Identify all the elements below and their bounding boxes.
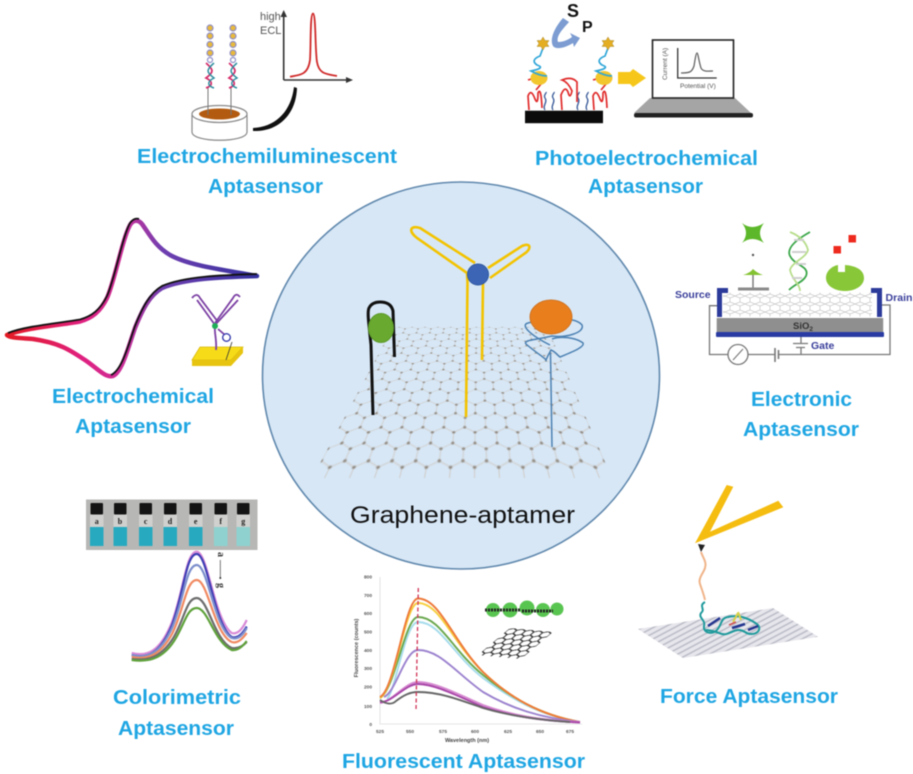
SiO2 layer and gate bar: 2 xyxy=(809,326,813,333)
label: Electronic Aptasensor: Aptasensor xyxy=(743,419,859,441)
cantilever xyxy=(695,485,783,543)
vials photo: g xyxy=(241,517,245,526)
label: Electrochemiluminescent Aptasensor: Electrochemiluminescent xyxy=(137,146,397,168)
label: Fluorescent Aptasensor: Fluorescent Aptasensor xyxy=(342,751,585,773)
fluorescence axes: 525 xyxy=(376,729,384,735)
blue looped aptamer xyxy=(525,300,583,447)
label: Photoelectrochemical Aptasensor xyxy=(535,148,758,198)
a to g arrow xyxy=(215,552,226,588)
fluorescence curves xyxy=(380,598,580,722)
ECL chart xyxy=(260,10,353,83)
fluorescence axes: 600 xyxy=(364,611,372,617)
SiO2 layer and gate bar: SiO xyxy=(793,321,809,332)
icon: S to P arrow: S xyxy=(567,1,579,21)
surface xyxy=(638,608,818,658)
circuit labels: Drain xyxy=(886,292,912,304)
fluorescence axes xyxy=(354,574,582,744)
aptamers with targets xyxy=(350,225,584,701)
panel: electrochemical aptasensor xyxy=(4,217,260,608)
arrow: electrode to chart xyxy=(253,87,297,131)
fluorescence axes: 800 xyxy=(364,574,372,580)
icon: stars xyxy=(537,37,614,50)
label: Electrochemical Aptasensor: Aptasensor xyxy=(75,416,191,438)
fluorescence axes: 625 xyxy=(504,729,512,735)
icon: DNA helix xyxy=(789,232,810,291)
fluorescence axes: Fluorescence (counts) xyxy=(354,618,360,677)
fluorescence axes: 400 xyxy=(364,648,372,654)
label: Electronic Aptasensor: Electronic xyxy=(751,389,852,411)
label: Electrochemiluminescent Aptasensor xyxy=(137,146,397,198)
arrow: yellow xyxy=(618,69,646,87)
label: Colorimetric Aptasensor xyxy=(113,687,241,740)
fluorescence axes: Wavelength (nm) xyxy=(445,738,489,744)
fluorescence axes: 200 xyxy=(364,684,372,690)
icon: S to P arrow: P xyxy=(582,19,593,36)
panel: central graphene-aptamer circle xyxy=(261,180,661,724)
panel: force aptasensor xyxy=(638,484,838,708)
fluorescence axes: 675 xyxy=(566,729,574,735)
label: Electrochemical Aptasensor: Electrochemical xyxy=(52,386,214,408)
panel: electrochemiluminescent aptasensor xyxy=(137,10,398,198)
vials photo: d xyxy=(168,517,173,526)
fluorescence axes: 100 xyxy=(364,704,372,710)
label: Electrochemiluminescent Aptasensor: Aptasensor xyxy=(208,176,323,198)
absorbance curves xyxy=(132,552,247,661)
panel: colorimetric aptasensor xyxy=(86,499,258,740)
icon: DNA probes xyxy=(206,25,237,115)
ECL chart: high xyxy=(260,11,281,23)
fluorescence axes: 650 xyxy=(536,729,544,735)
label: Colorimetric Aptasensor: Aptasensor xyxy=(118,718,234,740)
fluorescence axes: 575 xyxy=(439,729,447,735)
vials photo: b xyxy=(118,517,123,526)
circuit wiring xyxy=(710,305,890,364)
icon: electrode xyxy=(192,106,247,140)
fluorescence axes: 500 xyxy=(364,630,372,636)
circle background xyxy=(261,180,661,570)
tip xyxy=(698,544,705,552)
icon: S to P arrow xyxy=(552,1,593,48)
black hairpin aptamer xyxy=(368,302,394,415)
vials photo: e xyxy=(194,517,198,526)
ECL chart: ECL xyxy=(260,25,281,37)
SiO2 layer and gate bar xyxy=(716,318,884,337)
peak marker xyxy=(416,588,418,710)
cyclic voltammogram xyxy=(7,219,257,376)
label: Photoelectrochemical Aptasensor: Aptasensor xyxy=(588,176,703,198)
icon: laptop with chart: Potential (V) xyxy=(680,83,716,90)
graphene channel xyxy=(723,292,872,316)
source and drain electrodes xyxy=(717,288,882,317)
icon: red squares and green receptor xyxy=(826,235,864,291)
vials photo xyxy=(86,500,258,550)
fluorescence axes: 550 xyxy=(406,729,414,735)
yellow three-way aptamer xyxy=(411,227,529,417)
label: Photoelectrochemical Aptasensor: Photoelectrochemical xyxy=(535,148,758,170)
fluorescence axes: 0 xyxy=(369,722,372,728)
vials photo: c xyxy=(144,517,148,526)
fluorescence axes: 300 xyxy=(364,666,372,672)
label: Electrochemical Aptasensor xyxy=(52,386,214,438)
polymer linker xyxy=(700,552,706,600)
circuit labels xyxy=(675,289,912,352)
title: Graphene-aptamer: Graphene-aptamer xyxy=(350,502,575,529)
icon: laptop with chart xyxy=(634,40,753,118)
icon: laptop with chart: Current (A) xyxy=(662,48,669,80)
icon: sensor surface with strands xyxy=(525,48,612,123)
panel: fluorescent aptasensor xyxy=(342,574,586,773)
graphene sheet xyxy=(320,326,606,478)
a to g arrow: a xyxy=(215,552,226,557)
circuit labels: Source xyxy=(675,289,711,301)
label: Electronic Aptasensor xyxy=(743,389,859,441)
a to g arrow: g xyxy=(215,583,226,588)
folded aptamer xyxy=(700,602,759,634)
panel: photoelectrochemical aptasensor xyxy=(524,1,758,198)
vials photo: a xyxy=(95,517,99,526)
icon: green target with receptor xyxy=(738,223,769,290)
icon: green molecule on graphene xyxy=(478,600,564,659)
circuit labels: Gate xyxy=(811,340,835,352)
fluorescence axes: 700 xyxy=(364,593,372,599)
vials photo: f xyxy=(219,517,222,526)
icon: aptamer on gold electrode xyxy=(192,295,243,366)
fluorescence axes: 600 xyxy=(471,729,479,735)
label: Colorimetric Aptasensor: Colorimetric xyxy=(113,687,241,709)
label: Force Aptasensor: Force Aptasensor xyxy=(660,686,838,708)
panel: electronic aptasensor xyxy=(674,222,913,441)
